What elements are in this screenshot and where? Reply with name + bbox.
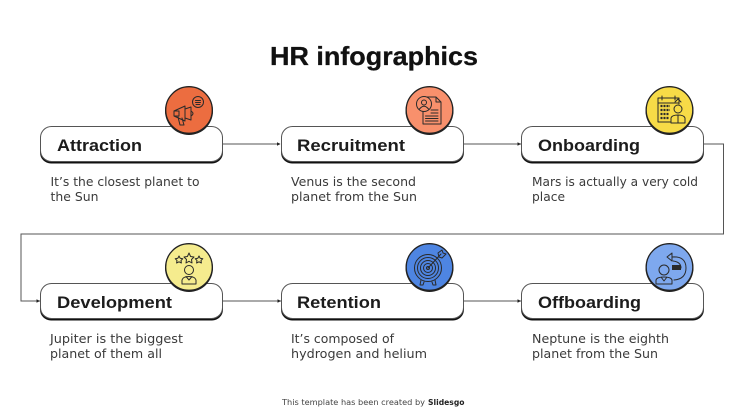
icon: person with stars [165,244,213,292]
panel: attraction [40,87,223,204]
panel: onboarding [521,87,704,204]
heading box: onboarding [521,126,704,164]
description: offboarding: Neptune is the eighth [532,331,669,346]
arrow: retention to offboarding [463,299,521,303]
description: development: planet of them all [50,346,162,361]
panel: development [40,244,223,361]
description: attraction: It’s the closest planet to [50,174,200,189]
description: retention: hydrogen and helium [291,346,427,361]
description: development: Jupiter is the biggest [49,331,183,346]
description: recruitment: Venus is the second [291,174,416,189]
heading box: recruitment [281,126,464,164]
description: onboarding: Mars is actually a very cold [532,174,698,189]
heading: development: Development [57,294,173,312]
icon: target with arrow [406,244,454,292]
heading: recruitment: Recruitment [297,137,406,155]
panel: offboarding [521,244,704,361]
icon: megaphone [165,87,213,135]
description: recruitment [291,174,417,204]
panel: retention [281,244,464,361]
description: recruitment: planet from the Sun [291,189,417,204]
icon: calendar and person [646,87,694,135]
arrow: onboarding to development [21,144,724,303]
description: retention: It’s composed of [291,331,395,346]
description: development [49,331,183,361]
heading box: development [40,284,223,320]
heading: offboarding: Offboarding [538,294,641,312]
heading box: attraction [40,126,223,164]
connectors [21,142,724,303]
arrow: attraction to recruitment [223,142,280,146]
description: retention [291,331,427,361]
description: onboarding [532,174,698,204]
arrow: recruitment to onboarding [463,142,521,146]
heading box: retention [281,284,464,320]
description: offboarding [532,331,669,361]
description: attraction: the Sun [50,189,98,204]
icon: person with return arrow [646,244,694,292]
footer credit: This template has been created by [281,398,425,407]
title: HR infographics [270,41,478,71]
heading: onboarding: Onboarding [538,137,640,155]
heading: retention: Retention [297,294,381,312]
panel: recruitment [281,87,464,204]
description: offboarding: planet from the Sun [532,346,658,361]
heading box: offboarding [521,284,704,320]
description: attraction [50,174,200,204]
icon: resume document [406,87,454,135]
footer credit: Slidesgo [428,398,465,407]
arrow: development to retention [223,299,281,303]
description: onboarding: place [532,189,565,204]
heading: attraction: Attraction [57,137,142,155]
